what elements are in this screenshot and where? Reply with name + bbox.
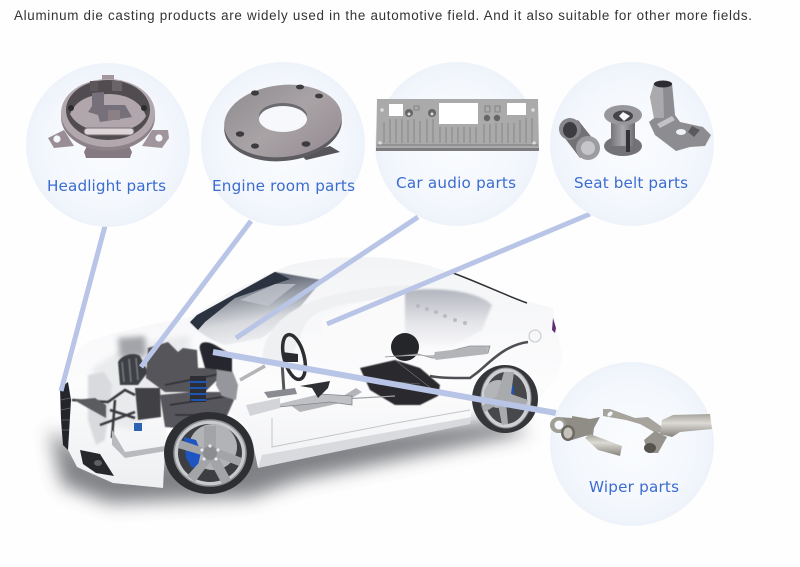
- leader line: seat belt: [327, 214, 590, 324]
- intro text: Aluminum die casting products are widely used in the automotive field. And it also suitable for other more fields.: [14, 8, 752, 23]
- suspension arms: [72, 390, 135, 438]
- rear window dots: [416, 304, 467, 325]
- exhaust pipe: [385, 346, 490, 358]
- panel: headlight parts: [26, 63, 190, 227]
- label: headlight parts: Headlight parts: [47, 177, 166, 195]
- roof spoiler stripe: [453, 273, 527, 303]
- front window: [322, 292, 405, 362]
- brake booster: [200, 342, 232, 372]
- label: car audio parts: Car audio parts: [396, 174, 516, 192]
- engine upper block: [146, 342, 222, 392]
- muffler disc: [391, 333, 419, 361]
- leader line: car audio: [236, 217, 418, 338]
- icon: seat belt spool: [559, 118, 600, 160]
- roof glare: [240, 284, 296, 306]
- engine main box: [135, 388, 161, 420]
- fog lamp: [80, 450, 114, 476]
- radiator: [88, 372, 112, 445]
- windshield dark top edge: [190, 272, 290, 330]
- panel: seat belt parts: [550, 62, 714, 226]
- steering wheel: [278, 332, 310, 382]
- rear shading on lower body: [258, 417, 472, 468]
- rear wheel: [472, 365, 538, 433]
- icon: headlight housing: [48, 75, 169, 158]
- intake manifold: [118, 354, 148, 385]
- engine air box: [118, 336, 146, 358]
- icon: seat belt bracket: [649, 80, 711, 151]
- door seam: [272, 410, 470, 447]
- car ground shadow: [50, 420, 530, 503]
- icon: wiper link right: [603, 409, 712, 453]
- leader line: headlight: [61, 226, 105, 391]
- label: seat belt parts: Seat belt parts: [574, 174, 688, 192]
- car illustration: [50, 257, 563, 503]
- icon: seat belt sleeve: [604, 105, 642, 156]
- label: wiper parts: Wiper parts: [589, 478, 679, 496]
- door window frame: [262, 285, 412, 365]
- spokes: [178, 426, 242, 484]
- fuel line: [430, 342, 528, 378]
- leader line: wiper: [213, 352, 556, 413]
- rear brake caliper: [506, 384, 514, 394]
- panel: engine room parts: [201, 62, 365, 226]
- car body: [60, 257, 563, 488]
- windshield: [190, 272, 322, 345]
- blue caliper: [184, 437, 201, 468]
- blue coil spring: [189, 376, 207, 402]
- leader line: engine room: [141, 221, 251, 367]
- front wheel: [164, 412, 254, 494]
- seat mount: [300, 381, 330, 398]
- blue engine part: [134, 423, 142, 431]
- engine bay haze: [92, 335, 190, 430]
- icon: engine plate: [221, 79, 345, 167]
- panel: car audio parts: [375, 62, 539, 226]
- rocker: [246, 398, 280, 416]
- panel: wiper parts: [550, 362, 714, 526]
- engine lower bracket: [160, 392, 234, 430]
- lower shroud: [112, 430, 172, 458]
- tail light: [552, 318, 556, 333]
- fuel cap: [529, 330, 541, 342]
- shock tower: [216, 370, 238, 400]
- icon: audio face plate: [376, 99, 539, 151]
- fuel tank: [360, 360, 440, 405]
- rear side interior: [405, 289, 492, 345]
- grille: [60, 382, 71, 450]
- center tunnel: [290, 388, 362, 412]
- label: engine room parts: Engine room parts: [212, 177, 355, 195]
- steering column: [282, 362, 284, 392]
- engine assembly: [72, 342, 238, 438]
- icon: wiper link left: [550, 416, 622, 456]
